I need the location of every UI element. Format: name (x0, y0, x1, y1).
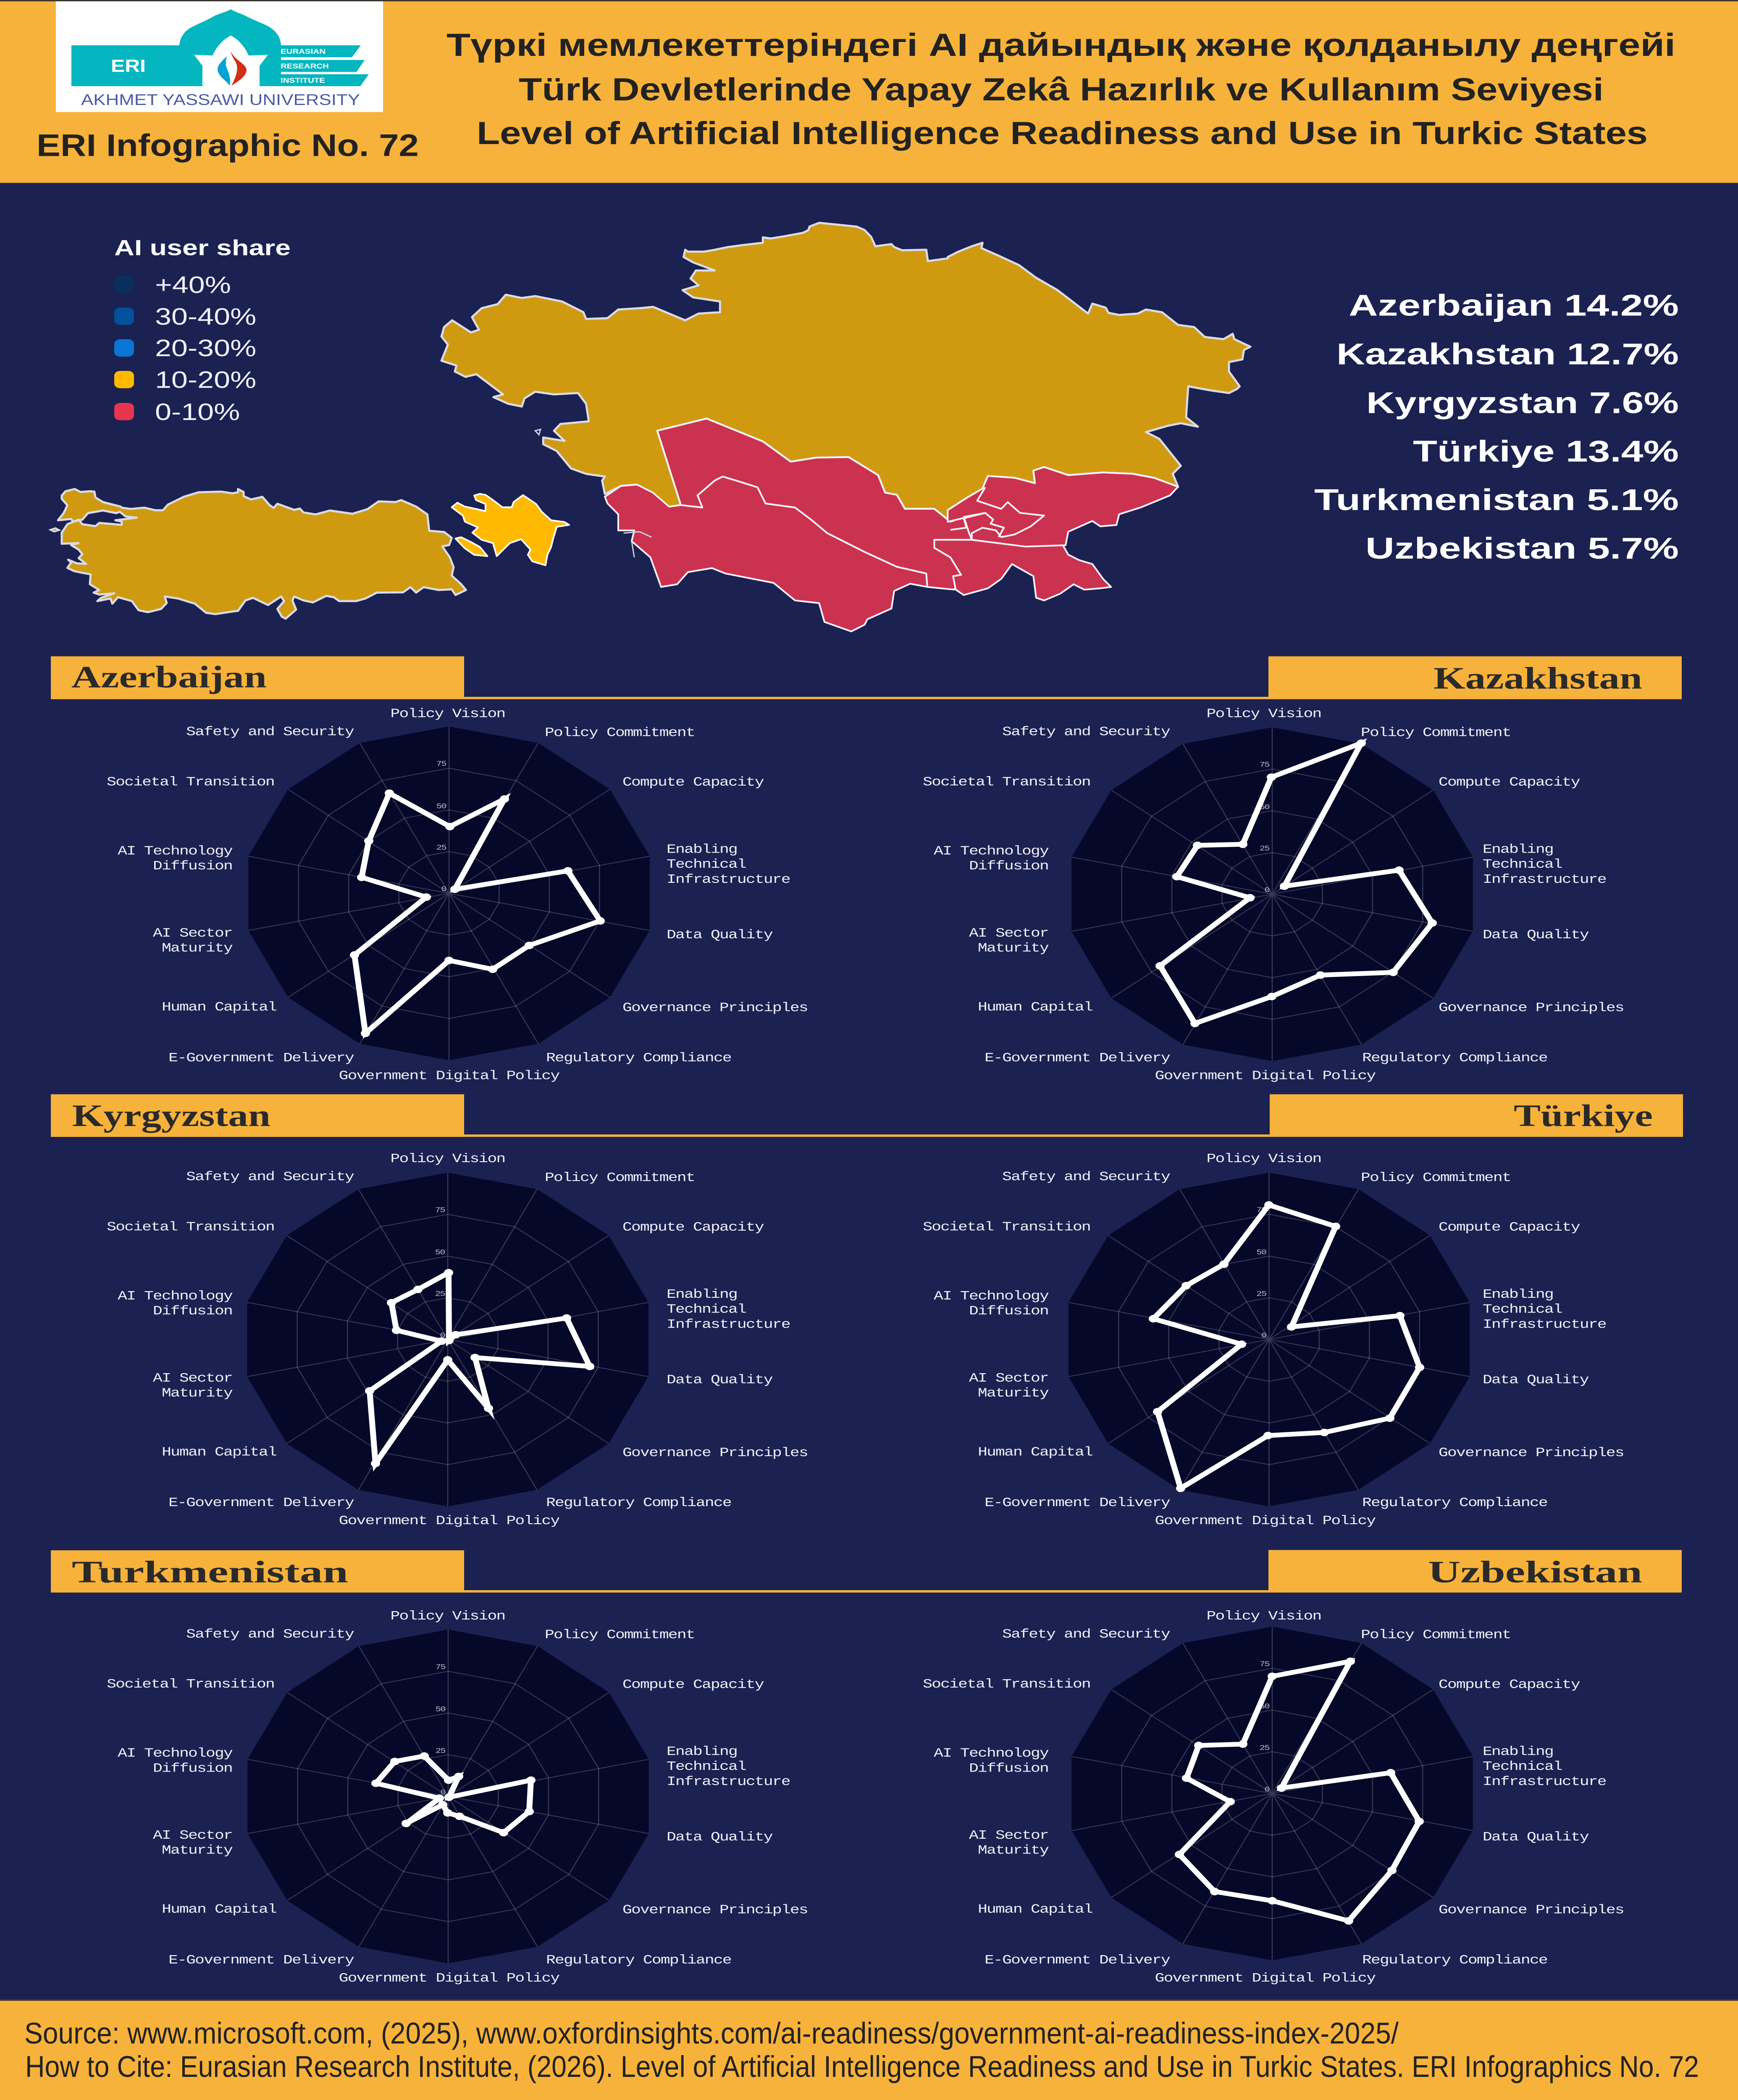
panel: Kyrgyzstan and Türkiye heading bar: Kyrgyzstan (72, 1098, 270, 1133)
radar chart: Türkiye: Governance Principles (1439, 1446, 1624, 1460)
radar chart: Azerbaijan: Maturity (162, 941, 233, 956)
radar chart: Kazakhstan: Maturity (978, 941, 1049, 956)
logo: ERI Akhmet Yassawi University: INSTITUTE (281, 77, 325, 85)
map: Tajikistan (934, 540, 1111, 601)
panel: Turkmenistan and Uzbekistan heading bar: Turkmenistan (72, 1555, 348, 1589)
radar chart: Türkiye: Enabling (1483, 1287, 1553, 1302)
radar chart: Kyrgyzstan: AI Sector (153, 1371, 232, 1386)
radar chart: Uzbekistan: 0 (1264, 1785, 1269, 1794)
radar chart: Kazakhstan: 75 (1260, 761, 1269, 769)
radar chart: Kazakhstan: Safety and Security (1002, 725, 1170, 740)
radar chart: Kyrgyzstan: Societal Transition (107, 1220, 274, 1234)
radar chart: Uzbekistan: Policy Commitment (1361, 1628, 1511, 1642)
radar chart: Türkiye (923, 1152, 1624, 1528)
radar chart: Türkiye: Diffusion (969, 1304, 1048, 1318)
radar chart: Turkmenistan: Infrastructure (667, 1774, 790, 1789)
radar chart: Kyrgyzstan: Data Quality (667, 1373, 773, 1387)
radar chart: Kazakhstan (923, 707, 1624, 1084)
radar chart: Kyrgyzstan: Maturity (162, 1386, 233, 1401)
radar chart: Kyrgyzstan: Infrastructure (667, 1317, 790, 1332)
radar chart: Kyrgyzstan (107, 1152, 808, 1528)
radar chart: Uzbekistan: Data Quality (1483, 1830, 1589, 1845)
title: Kazakh: Түркі мемлекеттеріндегі AI дайындық және қолданылу деңгейі (446, 27, 1675, 63)
radar chart: Türkiye: AI Technology (934, 1289, 1049, 1304)
legend: AI user share (114, 236, 291, 425)
radar chart: Turkmenistan: 25 (436, 1747, 445, 1756)
radar chart: Azerbaijan: E-Government Delivery (168, 1051, 354, 1066)
radar chart: Kyrgyzstan: Regulatory Compliance (546, 1496, 731, 1510)
radar chart: Azerbaijan: Infrastructure (667, 872, 790, 887)
radar chart: Kyrgyzstan: Government Digital Policy (339, 1514, 559, 1528)
radar chart: Uzbekistan: Enabling (1483, 1745, 1553, 1759)
radar chart: Turkmenistan: Diffusion (153, 1761, 232, 1776)
logo: ERI Akhmet Yassawi University: AKHMET YASSAWI UNIVERSITY (81, 91, 360, 108)
legend: AI user share: 20-30% (155, 335, 256, 362)
legend: AI user share: 0-10% (155, 398, 240, 425)
radar chart: Uzbekistan: 50 (1260, 1702, 1269, 1711)
radar chart: Turkmenistan: Technical (667, 1759, 746, 1774)
map: Turkmenistan (605, 477, 927, 631)
radar chart: Türkiye: Technical (1483, 1302, 1562, 1317)
radar chart: Uzbekistan: AI Sector (969, 1828, 1048, 1843)
radar chart: Kazakhstan: Societal Transition (923, 775, 1090, 790)
radar chart: Türkiye: Policy Commitment (1361, 1171, 1511, 1185)
radar chart: Türkiye: Government Digital Policy (1155, 1514, 1376, 1528)
radar chart: Azerbaijan: Safety and Security (186, 725, 354, 740)
country AI user share values: Uzbekistan 5.7% (1365, 531, 1679, 565)
radar chart: Uzbekistan: 25 (1260, 1744, 1269, 1753)
radar chart: Türkiye: Policy Vision (1207, 1152, 1321, 1166)
country AI user share values: Türkiye 13.4% (1413, 434, 1679, 468)
radar chart: Azerbaijan: 75 (436, 760, 446, 769)
country AI user share values: Kazakhstan 12.7% (1336, 337, 1679, 371)
radar chart: Kazakhstan: Human Capital (978, 1000, 1092, 1015)
radar chart: Azerbaijan: 50 (436, 802, 446, 811)
radar chart: Turkmenistan: Human Capital (162, 1902, 276, 1917)
radar chart: Türkiye: Regulatory Compliance (1362, 1496, 1547, 1510)
radar chart: Türkiye: Data Quality (1483, 1373, 1589, 1387)
radar chart: Turkmenistan (107, 1609, 808, 1986)
logo: ERI Akhmet Yassawi University (56, 1, 383, 112)
radar chart: Azerbaijan: AI Technology (118, 844, 233, 858)
radar chart: Azerbaijan: Data Quality (667, 928, 773, 942)
radar chart: Turkmenistan: Governance Principles (622, 1903, 808, 1917)
logo: ERI Akhmet Yassawi University: RESEARCH (281, 63, 329, 70)
panel: Azerbaijan and Kazakhstan heading bar (51, 656, 1682, 699)
map: Azerbaijan mainland (452, 494, 569, 565)
radar chart: Azerbaijan: Technical (667, 857, 746, 872)
radar chart: Türkiye: Compute Capacity (1439, 1220, 1580, 1235)
radar chart: Azerbaijan: Human Capital (162, 1000, 276, 1015)
radar chart: Kyrgyzstan: Governance Principles (622, 1446, 808, 1460)
radar chart: Kyrgyzstan: Enabling (667, 1287, 737, 1302)
radar chart: Turkmenistan: Maturity (162, 1843, 233, 1858)
panel: Kyrgyzstan and Türkiye heading bar (51, 1094, 1683, 1137)
radar chart: Türkiye: 25 (1256, 1290, 1266, 1299)
radar chart: Turkmenistan: AI Sector (153, 1828, 232, 1843)
radar chart: Kyrgyzstan: AI Technology (118, 1289, 233, 1304)
heading: infographic number: ERI Infographic No. 72 (37, 128, 419, 163)
radar chart: Azerbaijan: Policy Commitment (545, 725, 695, 740)
radar chart: Turkmenistan: 50 (436, 1705, 445, 1714)
radar chart: Kyrgyzstan: Technical (667, 1302, 746, 1317)
radar chart: Kazakhstan: Regulatory Compliance (1362, 1051, 1547, 1066)
radar chart: Kyrgyzstan: Compute Capacity (622, 1220, 764, 1235)
legend: AI user share: AI user share (114, 236, 291, 260)
radar chart: Kazakhstan: Data Quality (1483, 928, 1589, 942)
radar chart: Uzbekistan: Diffusion (969, 1761, 1048, 1776)
radar chart: Azerbaijan: Government Digital Policy (339, 1069, 559, 1084)
radar chart: Azerbaijan: 0 (441, 885, 446, 894)
radar chart: Kyrgyzstan: Policy Commitment (545, 1171, 695, 1185)
legend: AI user share: 10-20% (155, 366, 256, 393)
radar chart: Turkmenistan: Safety and Security (186, 1627, 354, 1642)
radar chart: Kyrgyzstan: 75 (435, 1206, 445, 1215)
legend: AI user share: 30-40% (155, 303, 256, 330)
radar chart: Azerbaijan: Compute Capacity (622, 775, 764, 790)
radar chart: Uzbekistan: Compute Capacity (1439, 1677, 1580, 1692)
radar chart: Kazakhstan: Diffusion (969, 859, 1048, 874)
panel: footer sources (0, 2000, 1738, 2100)
panel: Turkmenistan and Uzbekistan heading bar: Uzbekistan (1428, 1555, 1642, 1589)
radar chart: Türkiye: Human Capital (978, 1445, 1092, 1460)
logo: ERI Akhmet Yassawi University: ERI (111, 56, 146, 76)
radar chart: Uzbekistan: Human Capital (978, 1902, 1092, 1917)
legend: AI user share: +40% (155, 271, 231, 298)
title: English: Level of Artificial Intelligence Readiness and Use in Turkic States (477, 116, 1648, 151)
title: Turkish: Türk Devletlerinde Yapay Zekâ Hazırlık ve Kullanım Seviyesi (519, 72, 1604, 108)
radar chart: Türkiye: Infrastructure (1483, 1317, 1606, 1332)
radar chart: Kyrgyzstan: Diffusion (153, 1304, 232, 1318)
panel: Kyrgyzstan and Türkiye heading bar: Türkiye (1514, 1098, 1653, 1133)
radar chart: Kazakhstan: Policy Commitment (1361, 725, 1511, 740)
radar chart: Kazakhstan: Infrastructure (1483, 872, 1606, 887)
radar chart: Uzbekistan: Safety and Security (1002, 1627, 1170, 1642)
map: Nakhchivan (455, 537, 487, 556)
radar chart: Turkmenistan: Data Quality (667, 1830, 773, 1845)
radar chart: Kazakhstan: AI Sector (969, 926, 1048, 941)
radar chart: Uzbekistan: Technical (1483, 1759, 1562, 1774)
radar chart: Kazakhstan: AI Technology (934, 844, 1049, 858)
radar chart: Kazakhstan: 0 (1264, 886, 1269, 895)
radar chart: Turkmenistan: Policy Vision (391, 1609, 505, 1624)
radar chart: Uzbekistan: Maturity (978, 1843, 1049, 1858)
radar chart: Kazakhstan: Technical (1483, 857, 1562, 872)
radar chart: Uzbekistan: Infrastructure (1483, 1774, 1606, 1789)
radar chart: Uzbekistan: Government Digital Policy (1155, 1971, 1376, 1986)
panel: header band (0, 0, 1738, 183)
radar chart: Türkiye: 75 (1256, 1206, 1266, 1215)
radar chart: Turkmenistan: Societal Transition (107, 1677, 274, 1692)
panel: Azerbaijan and Kazakhstan heading bar: Kazakhstan (1433, 661, 1642, 696)
radar chart: Türkiye: Maturity (978, 1386, 1049, 1401)
panel: Azerbaijan and Kazakhstan heading bar: Azerbaijan (71, 659, 267, 694)
radar chart: Kazakhstan: Enabling (1483, 843, 1553, 857)
radar chart: Azerbaijan: AI Sector (153, 926, 232, 941)
radar chart: Uzbekistan: AI Technology (934, 1746, 1049, 1761)
radar chart: Kyrgyzstan: Safety and Security (186, 1170, 354, 1184)
radar chart: Kyrgyzstan: Policy Vision (391, 1152, 505, 1166)
radar chart: Kazakhstan: Compute Capacity (1439, 775, 1580, 790)
radar chart: Turkmenistan: Policy Commitment (545, 1628, 695, 1642)
radar chart: Uzbekistan: Societal Transition (923, 1677, 1090, 1692)
radar chart: Turkmenistan: Government Digital Policy (339, 1971, 559, 1986)
radar chart: Türkiye: 0 (1261, 1331, 1266, 1340)
radar chart: Turkmenistan: 0 (440, 1788, 445, 1797)
radar chart: Azerbaijan: Policy Vision (391, 707, 505, 722)
radar chart: Kyrgyzstan: 25 (435, 1290, 445, 1299)
radar chart: Azerbaijan: 25 (436, 844, 446, 852)
radar chart: Uzbekistan: Policy Vision (1207, 1609, 1321, 1624)
radar chart: Kazakhstan: Governance Principles (1439, 1001, 1624, 1015)
radar chart: Azerbaijan: Regulatory Compliance (546, 1051, 731, 1066)
radar chart: Kazakhstan: E-Government Delivery (985, 1051, 1170, 1066)
radar chart: Türkiye: E-Government Delivery (985, 1496, 1170, 1510)
radar chart: Uzbekistan: E-Government Delivery (985, 1953, 1170, 1968)
country AI user share values: Azerbaijan 14.2% (1349, 289, 1679, 322)
panel: Turkmenistan and Uzbekistan heading bar (51, 1550, 1682, 1593)
radar chart: Turkmenistan: Enabling (667, 1745, 737, 1759)
radar chart: Uzbekistan: 75 (1260, 1660, 1269, 1669)
radar chart: Turkmenistan: Compute Capacity (622, 1677, 764, 1692)
radar chart: Kazakhstan: 25 (1260, 845, 1269, 853)
radar chart: Turkmenistan: E-Government Delivery (168, 1953, 354, 1968)
map: Central Asia (441, 223, 1250, 631)
map: Türkiye and Azerbaijan (50, 489, 569, 619)
radar chart: Azerbaijan (107, 707, 808, 1084)
radar chart: Uzbekistan: Regulatory Compliance (1362, 1953, 1547, 1968)
map: Kyrgyzstan (948, 467, 1178, 546)
radar chart: Kyrgyzstan: 0 (440, 1331, 445, 1340)
radar chart: Turkmenistan: 75 (436, 1663, 445, 1672)
map: Uzbekistan (657, 419, 985, 590)
radar chart: Kazakhstan: Policy Vision (1207, 707, 1321, 722)
radar chart: Kyrgyzstan: Human Capital (162, 1445, 276, 1460)
radar chart: Kyrgyzstan: 50 (435, 1248, 445, 1257)
logo: ERI Akhmet Yassawi University: EURASIAN (281, 48, 326, 56)
radar chart: Azerbaijan: Diffusion (153, 859, 232, 874)
radar chart: Türkiye: AI Sector (969, 1371, 1048, 1386)
country AI user share values: Kyrgyzstan 7.6% (1366, 386, 1679, 420)
radar chart: Turkmenistan: AI Technology (118, 1746, 233, 1761)
radar chart: Kazakhstan: 50 (1260, 803, 1269, 812)
radar chart: Türkiye: Societal Transition (923, 1220, 1090, 1234)
radar chart: Türkiye: 50 (1256, 1248, 1266, 1257)
country AI user share values: Turkmenistan 5.1% (1314, 483, 1679, 517)
radar chart: Türkiye: Safety and Security (1002, 1170, 1170, 1184)
radar chart: Uzbekistan: Governance Principles (1439, 1903, 1624, 1917)
radar chart: Azerbaijan: Societal Transition (107, 775, 274, 790)
radar chart: Uzbekistan (923, 1609, 1624, 1986)
country AI user share values (1314, 289, 1679, 565)
radar chart: Turkmenistan: Regulatory Compliance (546, 1953, 731, 1968)
radar chart: Kazakhstan: Government Digital Policy (1155, 1069, 1376, 1084)
map: Turkic states choropleth (50, 223, 1250, 631)
radar chart: Kyrgyzstan: E-Government Delivery (168, 1496, 354, 1510)
radar chart: Azerbaijan: Governance Principles (622, 1001, 808, 1015)
radar chart: Azerbaijan: Enabling (667, 843, 737, 857)
